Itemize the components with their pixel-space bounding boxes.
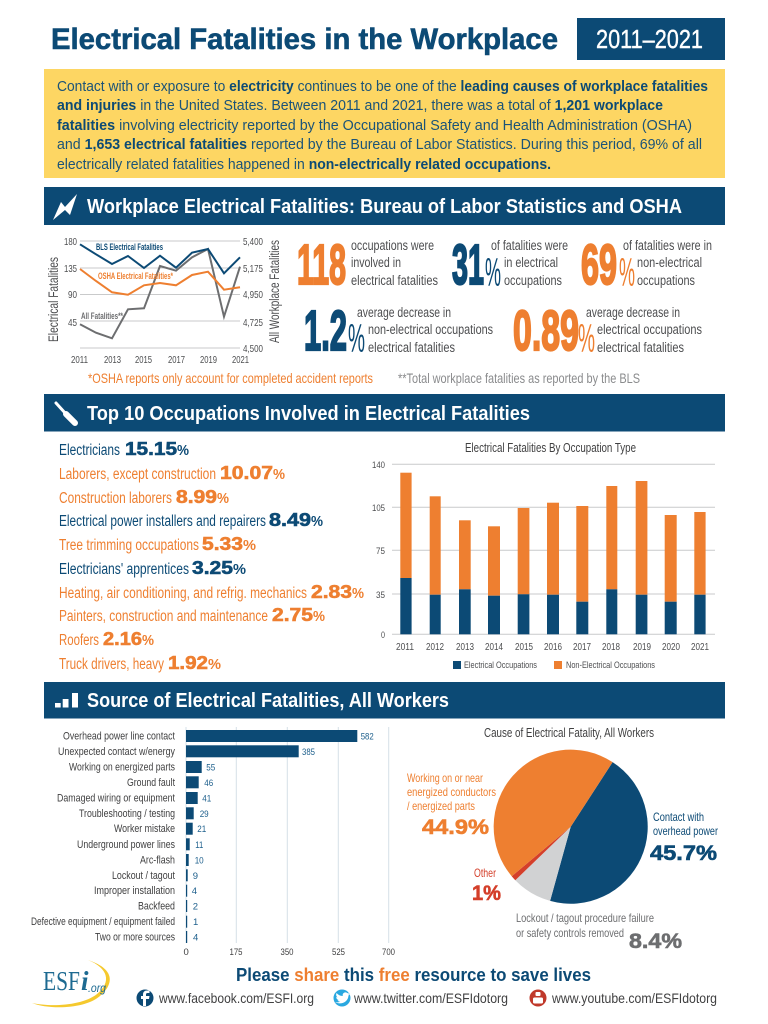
stat: 0.89 percent: electrical fatalities bbox=[597, 340, 684, 355]
pie chart title: Cause of Electrical Fatality, All Workers bbox=[484, 726, 654, 740]
list: top 10 occupations: 5.33 bbox=[202, 534, 243, 554]
stacked bar chart: occupation type: Electrical Fatalities By Occupation Type bbox=[465, 441, 636, 455]
horizontal bar chart: sources: Arc-flash bbox=[140, 854, 175, 866]
horizontal bar chart: sources: 525 bbox=[332, 947, 345, 958]
horizontal bar chart: sources: Working on energized parts bbox=[69, 762, 175, 774]
year badge bbox=[577, 18, 725, 60]
pie label: working on energized parts bbox=[407, 771, 496, 839]
horizontal bar chart: sources: Ground fault bbox=[127, 777, 175, 789]
stacked bar chart: occupation type: 2012 bbox=[426, 642, 444, 653]
list: top 10 occupations: 2.75 bbox=[272, 605, 313, 625]
line chart: 2015 bbox=[135, 355, 152, 366]
footnote: OSHA: *OSHA reports only account for completed accident reports bbox=[88, 370, 373, 386]
horizontal bar chart: sources: Troubleshooting / testing bbox=[79, 808, 175, 820]
logo: ESFi.org: .org bbox=[88, 981, 106, 995]
horizontal bar chart: sources: 582 bbox=[361, 732, 374, 742]
horizontal bar chart: sources: Underground power lines bbox=[77, 839, 175, 851]
logo: ESFi.org bbox=[32, 960, 110, 1007]
line chart: 2011 bbox=[71, 355, 88, 366]
call to action: Please share this free resource to save lives bbox=[236, 964, 591, 985]
stat: 69 percent: % bbox=[619, 251, 635, 295]
line chart: 2021 bbox=[232, 355, 249, 366]
social: facebook: www.facebook.com/ESFI.org bbox=[158, 990, 314, 1006]
horizontal bar chart: sources: 41 bbox=[202, 794, 211, 804]
list: top 10 occupations: 1.92 bbox=[168, 653, 208, 673]
section header: workplace electrical fatalities: Workplace Electrical Fatalities: Bureau of Labor Statistics and OSHA bbox=[87, 196, 682, 218]
list: top 10 occupations: % bbox=[313, 608, 325, 625]
stacked bar chart: occupation type: 2021 bbox=[691, 642, 709, 653]
pie label: lockout tagout: or safety controls removed bbox=[516, 926, 624, 940]
stat: 0.89 percent bbox=[513, 299, 702, 363]
horizontal bar chart: sources: 385 bbox=[302, 747, 315, 758]
horizontal bar chart: sources: Overhead power line contact bbox=[63, 730, 175, 742]
horizontal bar chart: sources: Damaged wiring or equipment bbox=[57, 792, 175, 804]
stacked bar chart: occupation type: 2016 bbox=[544, 642, 562, 653]
stat: 31 percent: 31 bbox=[452, 233, 484, 297]
horizontal bar chart: sources: 11 bbox=[195, 840, 203, 851]
footnote: BLS: **Total workplace fatalities as reported by the BLS bbox=[398, 370, 640, 386]
list: top 10 occupations: Electrical power installers and repairers bbox=[59, 513, 266, 530]
logo: ESFi.org: ESF bbox=[43, 966, 80, 996]
line chart: 2019 bbox=[200, 355, 217, 366]
stat: 1.2 percent: average decrease in bbox=[357, 305, 451, 320]
stat: 118 occupations: 118 bbox=[297, 233, 346, 297]
title: Electrical Fatalities in the Workplace bbox=[51, 23, 558, 56]
list: top 10 occupations: % bbox=[243, 537, 256, 554]
horizontal bar chart: sources bbox=[31, 727, 395, 958]
list: top 10 occupations: 10.07 bbox=[220, 463, 273, 483]
section header: workplace electrical fatalities bbox=[44, 187, 725, 225]
list: top 10 occupations: 8.49 bbox=[269, 510, 311, 530]
pie label: lockout tagout bbox=[516, 911, 682, 953]
list: top 10 occupations: Laborers, except construction bbox=[59, 466, 216, 483]
line chart: 90 bbox=[68, 289, 77, 301]
pie label: other: Other bbox=[474, 866, 496, 880]
line chart: Electrical Fatalities bbox=[46, 257, 61, 342]
stat: 69 percent: occupations bbox=[637, 273, 695, 288]
pie label: working on energized parts: / energized parts bbox=[407, 799, 475, 813]
stat: 118 occupations: occupations were bbox=[351, 238, 434, 253]
horizontal bar chart: sources: 55 bbox=[206, 762, 215, 774]
horizontal bar chart: sources: Defective equipment / equipment failed bbox=[31, 916, 175, 928]
list: top 10 occupations: 15.15 bbox=[125, 439, 177, 459]
stat: 31 percent: occupations bbox=[504, 273, 562, 288]
horizontal bar chart: sources: 9 bbox=[193, 871, 198, 882]
horizontal bar chart: sources: 700 bbox=[382, 947, 395, 958]
stacked bar chart: occupation type: 2020 bbox=[662, 642, 680, 653]
stacked bar chart: occupation type: 75 bbox=[376, 546, 385, 557]
list: top 10 occupations: % bbox=[273, 466, 285, 483]
stat: 1.2 percent: non-electrical occupations bbox=[368, 322, 493, 337]
line chart: 5,400 bbox=[243, 236, 263, 248]
section header: source of electrical fatalities bbox=[44, 682, 725, 718]
stat: 69 percent bbox=[581, 233, 712, 297]
horizontal bar chart: sources: 46 bbox=[204, 778, 213, 789]
line chart: 4,950 bbox=[243, 289, 263, 301]
stacked bar chart: occupation type: 2019 bbox=[633, 642, 651, 653]
stacked bar chart: occupation type: Non-Electrical Occupations bbox=[566, 660, 655, 671]
section header: top 10 occupations: Top 10 Occupations Involved in Electrical Fatalities bbox=[87, 403, 530, 425]
stat: 31 percent bbox=[452, 233, 568, 297]
list: top 10 occupations: Tree trimming occupations bbox=[59, 537, 199, 554]
horizontal bar chart: sources: 4 bbox=[192, 886, 197, 897]
stat: 118 occupations bbox=[297, 233, 438, 297]
horizontal bar chart: sources: 29 bbox=[200, 809, 209, 820]
stacked bar chart: occupation type: Electrical Occupations bbox=[464, 660, 537, 671]
list: top 10 occupations: Painters, construction and maintenance bbox=[59, 608, 268, 625]
stat: 69 percent: 69 bbox=[581, 233, 617, 297]
stat: 118 occupations: electrical fatalities bbox=[351, 273, 438, 288]
list: top 10 occupations: % bbox=[233, 561, 246, 578]
horizontal bar chart: sources: 21 bbox=[197, 824, 206, 835]
horizontal bar chart: sources: 10 bbox=[195, 856, 204, 866]
pie label: working on energized parts: 44.9% bbox=[422, 816, 489, 839]
intro text panel bbox=[44, 69, 725, 178]
intro text panel: electrically related fatalities happened in non-electrically related occupations. bbox=[57, 157, 551, 173]
horizontal bar chart: sources: 1 bbox=[193, 917, 198, 928]
stat: 1.2 percent: 1.2 bbox=[304, 299, 347, 363]
section header: source of electrical fatalities: Source of Electrical Fatalities, All Workers bbox=[87, 690, 449, 712]
stat: 31 percent: in electrical bbox=[504, 255, 558, 270]
stat: 0.89 percent: average decrease in bbox=[586, 305, 680, 320]
pie chart bbox=[494, 750, 648, 904]
line chart: BLS Electrical Fatalities bbox=[96, 242, 163, 252]
horizontal bar chart: sources: 4 bbox=[193, 932, 198, 944]
list: top 10 occupations: Construction laborers bbox=[59, 490, 172, 507]
stat: 31 percent: of fatalities were bbox=[491, 238, 568, 253]
stacked bar chart: occupation type: 2015 bbox=[515, 642, 533, 653]
list: top 10 occupations: % bbox=[177, 442, 189, 459]
line chart: 4,725 bbox=[243, 317, 263, 329]
list: top 10 occupations: % bbox=[352, 585, 364, 602]
stat: 1.2 percent: electrical fatalities bbox=[368, 340, 455, 355]
stacked bar chart: occupation type: 2018 bbox=[602, 642, 620, 653]
list: top 10 occupations bbox=[59, 439, 364, 673]
stacked bar chart: occupation type: 2014 bbox=[485, 642, 503, 653]
line chart bbox=[46, 236, 282, 366]
horizontal bar chart: sources: Two or more sources bbox=[95, 932, 175, 944]
pie label: lockout tagout: Lockout / tagout procedure failure bbox=[516, 911, 654, 925]
list: top 10 occupations: 2.83 bbox=[311, 582, 352, 602]
pie label: contact with overhead power: overhead power bbox=[653, 824, 718, 838]
line chart: 4,500 bbox=[243, 343, 263, 355]
year badge: 2011–2021 bbox=[596, 24, 703, 54]
pie label: working on energized parts: energized conductors bbox=[407, 785, 496, 799]
list: top 10 occupations: 3.25 bbox=[192, 558, 233, 578]
horizontal bar chart: sources: 175 bbox=[230, 947, 242, 958]
pie label: contact with overhead power: Contact with bbox=[653, 810, 704, 824]
logo: ESFi.org: i bbox=[81, 966, 89, 996]
list: top 10 occupations: Electricians bbox=[59, 442, 120, 459]
line chart: All Fatalities** bbox=[81, 311, 123, 321]
pie label: contact with overhead power bbox=[650, 810, 718, 865]
pie label: working on energized parts: Working on or near bbox=[407, 771, 483, 785]
section header: top 10 occupations bbox=[44, 394, 725, 432]
list: top 10 occupations: Electricians' apprentices bbox=[59, 561, 189, 578]
horizontal bar chart: sources: Backfeed bbox=[138, 900, 175, 912]
stacked bar chart: occupation type: 2017 bbox=[573, 642, 591, 653]
stat: 0.89 percent: electrical occupations bbox=[597, 322, 702, 337]
horizontal bar chart: sources: Unexpected contact w/energy bbox=[58, 746, 175, 758]
horizontal bar chart: sources: Lockout / tagout bbox=[112, 870, 175, 882]
line chart: 2017 bbox=[168, 355, 185, 366]
stat: 0.89 percent: % bbox=[578, 317, 595, 361]
list: top 10 occupations: 8.99 bbox=[176, 487, 217, 507]
horizontal bar chart: sources: 350 bbox=[280, 947, 294, 958]
stat: 69 percent: of fatalities were in bbox=[623, 238, 712, 253]
stacked bar chart: occupation type: 35 bbox=[376, 590, 385, 601]
social: twitter: www.twitter.com/ESFIdotorg bbox=[353, 990, 508, 1006]
social: youtube: www.youtube.com/ESFIdotorg bbox=[551, 990, 717, 1006]
intro text panel: and injuries in the United States. Between 2011 and 2021, there was a total of 1,201 workplace bbox=[57, 98, 663, 114]
intro text panel: and 1,653 electrical fatalities reported by the Bureau of Labor Statistics. During this period, 69% of all bbox=[57, 137, 702, 153]
line chart: 2013 bbox=[104, 355, 121, 366]
line chart: 135 bbox=[64, 263, 77, 275]
stacked bar chart: occupation type: 140 bbox=[372, 460, 385, 471]
list: top 10 occupations: % bbox=[311, 513, 323, 530]
list: top 10 occupations: % bbox=[142, 632, 154, 649]
horizontal bar chart: sources: Improper installation bbox=[94, 885, 175, 897]
horizontal bar chart: sources: Worker mistake bbox=[114, 823, 175, 835]
stat: 1.2 percent: % bbox=[348, 317, 365, 361]
line chart: 45 bbox=[68, 317, 77, 329]
stat: 69 percent: non-electrical bbox=[637, 255, 702, 270]
stacked bar chart: occupation type: 105 bbox=[372, 503, 385, 514]
horizontal bar chart: sources: 0 bbox=[184, 947, 189, 958]
list: top 10 occupations: 2.16 bbox=[103, 629, 142, 649]
pie label: lockout tagout: 8.4% bbox=[629, 930, 682, 953]
stacked bar chart: occupation type bbox=[372, 441, 715, 671]
line chart: All Workplace Fatalities bbox=[267, 240, 282, 343]
pie label: other bbox=[472, 866, 501, 905]
line chart: 180 bbox=[64, 236, 77, 248]
intro text panel: Contact with or exposure to electricity continues to be one of the leading causes of workplace fatalities bbox=[57, 79, 708, 95]
stacked bar chart: occupation type: 0 bbox=[381, 630, 385, 641]
stacked bar chart: occupation type: 2013 bbox=[456, 642, 474, 653]
stat: 0.89 percent: 0.89 bbox=[513, 299, 579, 363]
list: top 10 occupations: Heating, air conditioning, and refrig. mechanics bbox=[59, 585, 307, 602]
pie label: other: 1% bbox=[472, 882, 501, 905]
stat: 31 percent: % bbox=[485, 251, 501, 295]
stacked bar chart: occupation type: 2011 bbox=[396, 642, 414, 653]
pie label: contact with overhead power: 45.7% bbox=[650, 842, 717, 865]
line chart: OSHA Electrical Fatalities* bbox=[98, 271, 173, 281]
list: top 10 occupations: % bbox=[208, 656, 221, 673]
line chart: 5,175 bbox=[243, 263, 263, 275]
stat: 1.2 percent bbox=[304, 299, 493, 363]
intro text panel: fatalities involving electricity reported by the Occupational Safety and Health Administration (OSHA) bbox=[57, 118, 692, 134]
list: top 10 occupations: Truck drivers, heavy bbox=[59, 656, 164, 673]
list: top 10 occupations: Roofers bbox=[59, 632, 99, 649]
stat: 118 occupations: involved in bbox=[351, 255, 401, 270]
horizontal bar chart: sources: 2 bbox=[193, 902, 198, 912]
list: top 10 occupations: % bbox=[217, 490, 229, 507]
